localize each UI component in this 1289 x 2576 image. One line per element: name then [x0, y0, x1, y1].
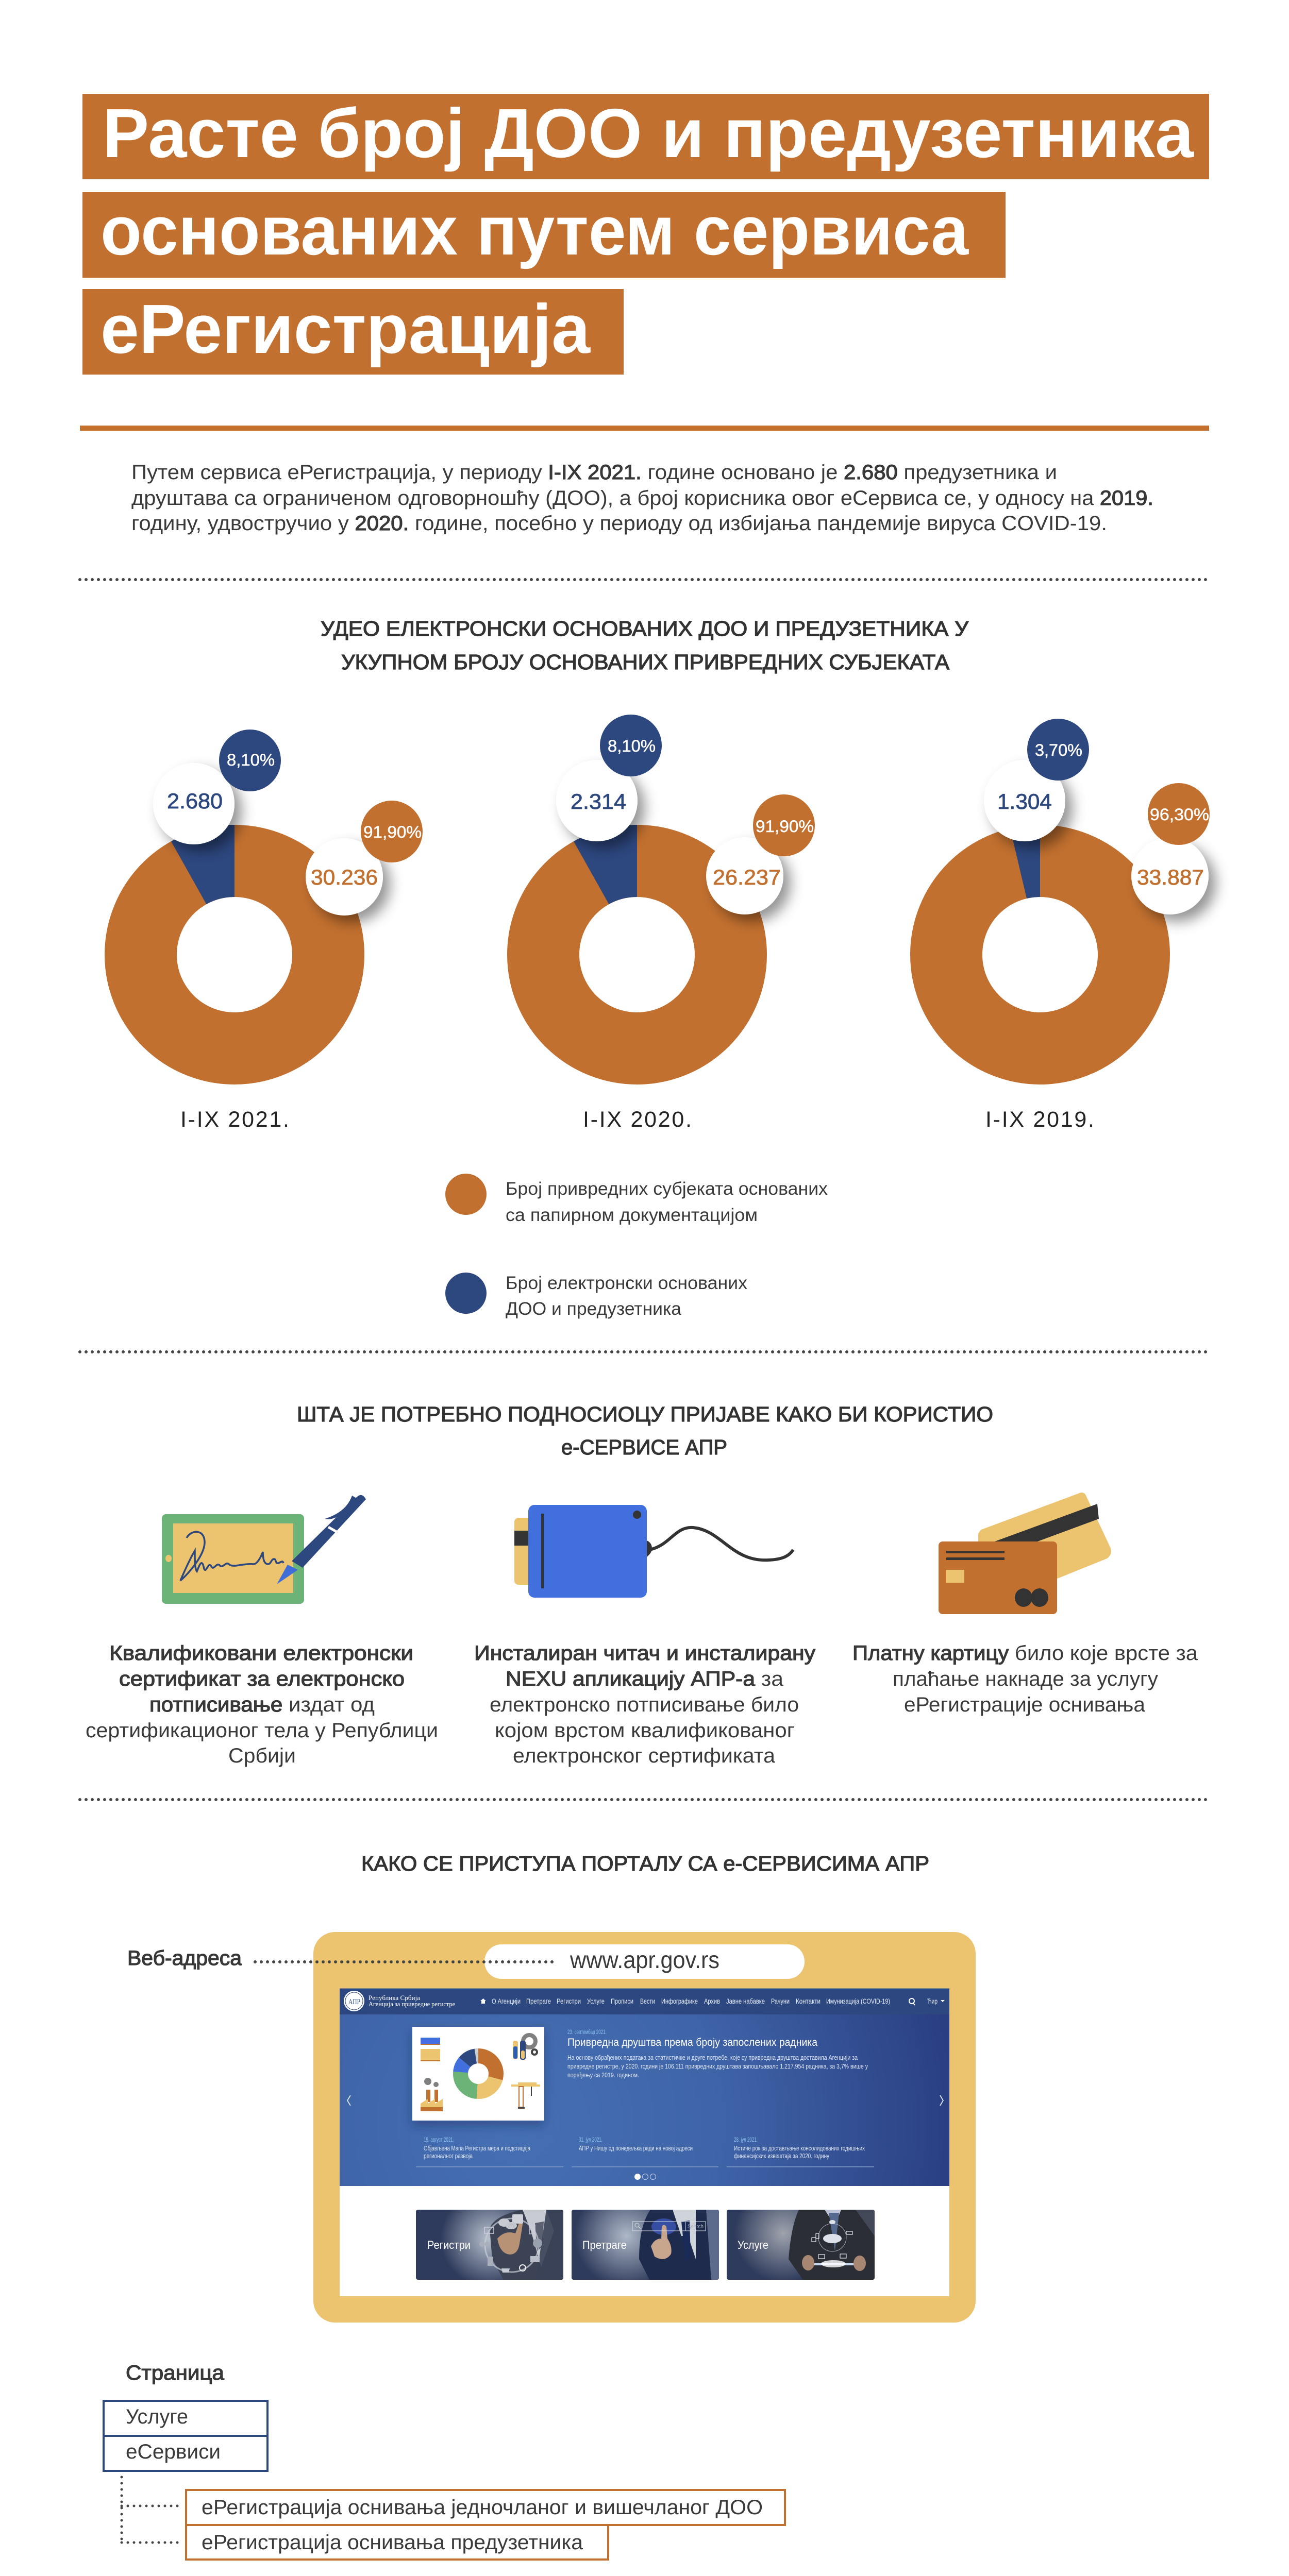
box: Услуге	[104, 2401, 267, 2436]
mini donut	[453, 2048, 504, 2099]
logo text: Агенција за привредне регистре	[369, 2000, 455, 2008]
bubble: 8,10%: 8,10%	[227, 751, 275, 769]
nav menu: Контакти	[796, 1997, 821, 2005]
bubble: 2.314	[556, 760, 638, 841]
year label: I-IX 2020.	[583, 1107, 692, 1132]
news items: 31. јул 2021.	[579, 2136, 602, 2143]
hero news text: поређењу са 2019. годином.	[567, 2071, 639, 2079]
requirement: certificate: потписивање издат од	[149, 1693, 375, 1716]
heading: what is needed	[297, 1402, 993, 1459]
donut chart: I-IX 2020	[543, 715, 815, 1132]
requirement: certificate: Квалификовани електронски	[109, 1642, 413, 1665]
news items: 28. јул 2021.	[734, 2136, 758, 2143]
nav menu: Јавне набавке	[726, 1997, 765, 2005]
intro text	[131, 461, 1153, 535]
logo	[344, 1991, 364, 2011]
news items: регионалног развоја	[424, 2152, 473, 2160]
hero news text: Привредна друштва према броју запослених радника	[567, 2037, 817, 2048]
donut chart: I-IX 2021	[141, 730, 423, 1132]
heading: what is needed: ШТА ЈЕ ПОТРЕБНО ПОДНОСИОЦУ ПРИЈАВЕ КАКО БИ КОРИСТИО	[297, 1402, 993, 1426]
hero news text: На основу обрађених података за статистичке и друге потребе, које су привредна друштва доставила Агенцији за	[567, 2054, 858, 2061]
legend item: electronic: Број електронски основаних	[506, 1273, 748, 1293]
requirement: payment card: плаћање накнаде за услугу	[893, 1668, 1158, 1690]
legend item: paper: Број привредних субјеката основаних	[506, 1179, 828, 1199]
card label: Регистри	[427, 2239, 471, 2251]
intro text: друштава са ограниченом одговорношћу (ДОО), а број корисника овог еСервиса се, у односу на 2019.	[131, 487, 1153, 510]
title line 2: основаних путем сервиса	[101, 192, 969, 269]
legend	[445, 1174, 828, 1319]
title line 3: еРегистрација	[101, 290, 591, 368]
news items: Објављена Мапа Регистра мера и подстицаја	[424, 2144, 531, 2152]
requirement: payment card: Платну картицу било које врсте за	[852, 1642, 1198, 1665]
box: еСервиси: еСервиси	[126, 2441, 221, 2463]
requirement: reader and NEXU: Инсталиран читач и инсталирану	[474, 1642, 815, 1665]
icon: card reader	[514, 1505, 793, 1598]
card: Регистри	[416, 2210, 563, 2280]
requirement: certificate: Србији	[228, 1744, 296, 1767]
heading: share of electronically founded: УДЕО ЕЛЕКТРОНСКИ ОСНОВАНИХ ДОО И ПРЕДУЗЕТНИКА У	[321, 617, 969, 640]
title line 1: Расте број ДОО и предузетника	[103, 94, 1194, 172]
bubble: 91,90%	[753, 794, 815, 856]
card label: Претраге	[582, 2239, 627, 2251]
bubble: 2.680	[153, 763, 235, 844]
legend item: paper: са папирном документацијом	[506, 1205, 758, 1225]
box: еРегистрација ДОО: еРегистрација оснивања једночланог и вишечланог ДОО	[202, 2496, 763, 2519]
nav menu: О Агенцији	[492, 1997, 521, 2005]
bubble: 26.237: 26.237	[713, 865, 781, 889]
requirement: payment card: еРегистрације оснивања	[904, 1693, 1146, 1716]
navigation: services	[104, 2401, 785, 2560]
bubble: 91,90%: 91,90%	[756, 817, 814, 836]
bubble: 30.236: 30.236	[311, 865, 378, 889]
bubble: 96,30%: 96,30%	[1150, 805, 1209, 824]
year label: I-IX 2019.	[985, 1107, 1094, 1132]
requirement: certificate	[86, 1642, 438, 1767]
bubble: 8,10%	[600, 715, 662, 776]
bubble: 1.304	[984, 760, 1065, 841]
hero news text	[567, 2028, 868, 2079]
url: www.apr.gov.rs	[570, 1946, 719, 1973]
bubble: 33.887: 33.887	[1137, 865, 1204, 889]
intro text: Путем сервиса еРегистрација, у периоду I-IX 2021. године основано је 2.680 предузетника и	[131, 461, 1057, 484]
box: еРегистрација предузетника	[186, 2525, 608, 2560]
card: Претраге: Search	[688, 2224, 704, 2230]
requirement: certificate: сертификационог тела у Републици	[86, 1719, 438, 1742]
nav menu: Имунизација (COVID-19)	[826, 1997, 890, 2005]
browser mockup	[255, 1932, 976, 2323]
requirement: reader and NEXU	[474, 1642, 815, 1767]
carousel arrows	[347, 2095, 943, 2106]
logo: АПР	[348, 1998, 360, 2006]
legend item: electronic: ДОО и предузетника	[506, 1299, 682, 1319]
donut chart: I-IX 2019	[946, 719, 1210, 1132]
bubble: 3,70%	[1027, 719, 1089, 781]
nav menu: Вести	[640, 1997, 655, 2005]
requirement: reader and NEXU: којом врстом квалификованог	[495, 1719, 795, 1742]
card label: Услуге	[738, 2239, 768, 2251]
hero news text: привредне регистре, у 2020. години је 106.111 привредних друштава запошљавало 1.217.954 радника, за 3,7% више у	[567, 2062, 868, 2070]
label: page: Страница	[126, 2362, 225, 2384]
requirement: certificate: сертификат за електронско	[119, 1668, 405, 1690]
address pill	[484, 1944, 805, 1979]
year label: I-IX 2021.	[180, 1107, 289, 1132]
box: еРегистрација предузетника: еРегистрација оснивања предузетника	[202, 2531, 583, 2554]
heading: share of electronically founded: УКУПНОМ БРОЈУ ОСНОВАНИХ ПРИВРЕДНИХ СУБЈЕКАТА	[341, 650, 950, 674]
card: Услуге	[727, 2210, 875, 2280]
nav menu: Услуге	[587, 1997, 605, 2005]
requirement: reader and NEXU: електронског сертификата	[513, 1744, 776, 1767]
nav menu: Рачуни	[771, 1997, 790, 2005]
nav menu: Прописи	[611, 1997, 633, 2005]
bubble: 33.887	[1131, 837, 1209, 914]
website screen	[340, 1988, 949, 2296]
bubble: 2.314: 2.314	[571, 789, 626, 814]
card: Претраге	[572, 2210, 719, 2280]
heading: how to access: КАКО СЕ ПРИСТУПА ПОРТАЛУ СА е-СЕРВИСИМА АПР	[361, 1852, 929, 1875]
nav menu: Претраге	[526, 1997, 551, 2005]
bubble: 2.680: 2.680	[167, 789, 223, 813]
heading: what is needed: е-СЕРВИСЕ АПР	[561, 1435, 727, 1459]
news items	[416, 2136, 874, 2167]
box: еРегистрација ДОО	[186, 2490, 785, 2525]
requirement: payment card	[852, 1642, 1198, 1716]
legend item: electronic	[445, 1273, 748, 1319]
bubble: 91,90%: 91,90%	[363, 823, 422, 841]
bubble: 8,10%	[219, 730, 281, 791]
box: еСервиси	[104, 2436, 267, 2471]
mini icons	[421, 2038, 440, 2044]
bubble: 91,90%	[361, 801, 423, 862]
news items: 19. август 2021.	[424, 2136, 454, 2143]
requirement: reader and NEXU: NEXU апликацију АПР-а за	[506, 1668, 784, 1690]
bubble: 96,30%	[1148, 783, 1210, 845]
bubble: 30.236	[306, 838, 383, 916]
logo text	[369, 1994, 455, 2008]
nav menu: Регистри	[557, 1997, 581, 2005]
icon: signature tablet and pen	[162, 1495, 366, 1604]
bubble: 1.304: 1.304	[997, 789, 1052, 814]
news items: финансијских извештаја за 2020. годину	[734, 2152, 829, 2160]
requirement: reader and NEXU: електронско потписивање било	[490, 1693, 799, 1716]
logo text: Република Србија	[369, 1994, 420, 2002]
box: Услуге: Услуге	[126, 2405, 188, 2428]
bubble: 3,70%: 3,70%	[1035, 741, 1082, 759]
heading: share of electronically founded	[321, 617, 969, 674]
website nav bar	[340, 1988, 949, 2014]
title	[82, 94, 1209, 375]
bubble: 8,10%: 8,10%	[608, 737, 656, 755]
hero illustration	[412, 2027, 544, 2121]
nav menu: Архив	[704, 1997, 720, 2005]
label: web address: Веб-адреса	[127, 1947, 242, 1970]
nav menu	[480, 1997, 945, 2005]
hero news text: 23. септембар 2021.	[567, 2028, 607, 2036]
news items: Истиче рок за достављање консолидованих годишњих	[734, 2144, 865, 2152]
carousel dots	[634, 2174, 656, 2180]
nav menu: Инфографике	[661, 1997, 698, 2005]
nav menu: Ћир	[927, 1997, 938, 2005]
intro text: годину, удвостручио у 2020. године, посебно у периоду од избијања пандемије вируса COVID-19.	[131, 512, 1107, 535]
icon: payment cards	[939, 1493, 1111, 1614]
news items: АПР у Нишу од понедељка ради на новој адреси	[579, 2144, 693, 2152]
bubble: 26.237	[706, 837, 783, 914]
legend item: paper	[445, 1174, 828, 1225]
